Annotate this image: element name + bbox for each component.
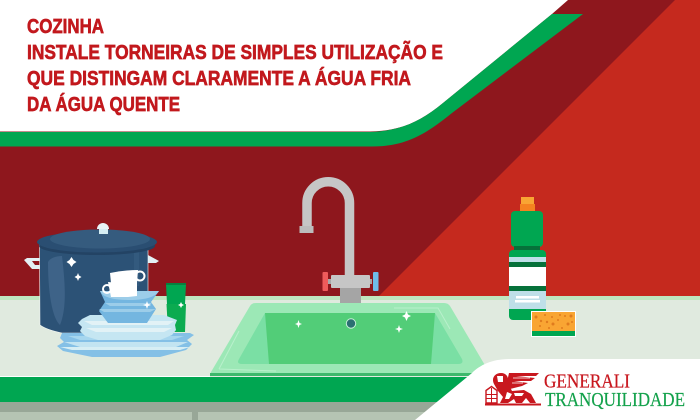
sink basin (265, 313, 435, 364)
valve body (328, 279, 372, 284)
sink walls (238, 313, 462, 364)
logo: Generali Tranquilidade (485, 370, 685, 411)
stock pot (24, 223, 159, 333)
cups (103, 270, 144, 297)
title: QUE DISTINGAM CLARAMENTE A ÁGUA FRIA (27, 67, 411, 90)
title: COZINHA (27, 15, 104, 38)
pot body (40, 245, 148, 333)
pot handles (24, 255, 159, 269)
pot lid (37, 223, 157, 255)
bottle lower body (509, 250, 546, 320)
book (486, 386, 497, 403)
faucet spout (307, 182, 350, 276)
title: DA ÁGUA QUENTE (27, 93, 180, 116)
logo panel (415, 359, 700, 420)
bottle cap (520, 197, 535, 212)
wall light red diagonal (375, 0, 700, 300)
logo wordmark GENERALI: GENERALI (544, 370, 630, 392)
bottle upper body (511, 211, 543, 247)
stack of small plates (78, 315, 177, 340)
stack of large plates (57, 333, 194, 357)
sink sparkles (295, 311, 411, 333)
green glasses (166, 283, 186, 332)
sparkles (66, 257, 82, 281)
bottle label (509, 257, 546, 309)
base line (485, 404, 541, 406)
title (27, 15, 443, 116)
faucet (300, 182, 378, 303)
title: INSTALE TORNEIRAS DE SIMPLES UTILIZAÇÃO E (27, 41, 443, 64)
sink (210, 303, 486, 376)
sink highlights (219, 308, 450, 371)
drain (346, 319, 356, 328)
cold water handle (373, 272, 378, 291)
green swoosh (0, 14, 583, 146)
lion head and body (493, 373, 536, 403)
sponge (531, 311, 576, 337)
winged lion emblem (485, 373, 541, 406)
white header panel (0, 0, 568, 132)
wall background (0, 0, 700, 300)
sink rim (210, 303, 486, 375)
faucet base (340, 287, 361, 303)
wings (507, 373, 539, 389)
hot water handle (322, 272, 328, 291)
counter front and cabinets (0, 377, 700, 420)
bowls (99, 291, 159, 323)
bottle (509, 197, 546, 320)
countertop (0, 296, 700, 378)
